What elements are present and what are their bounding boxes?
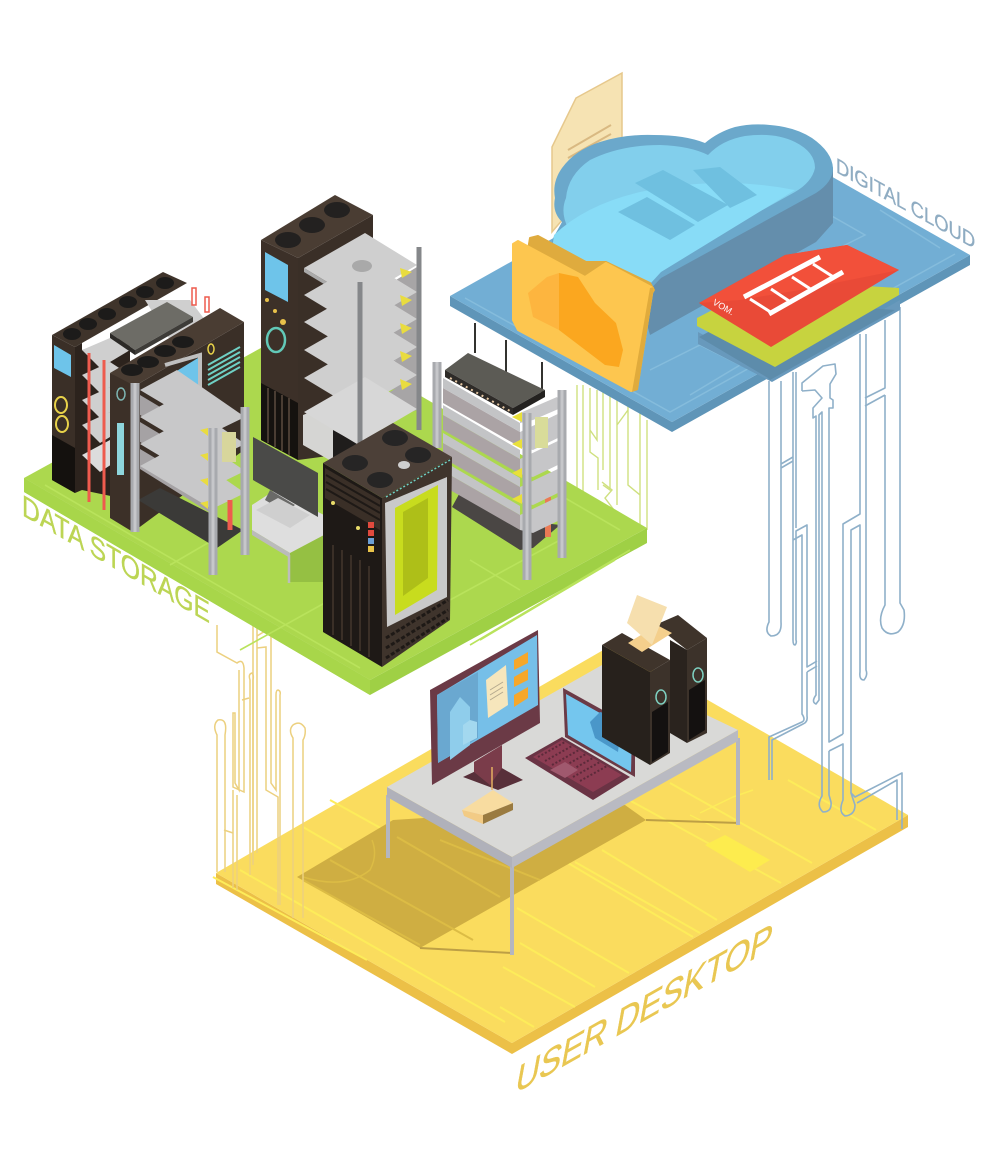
middle server with rack shelves <box>110 308 245 575</box>
laptop <box>525 688 635 800</box>
icon: document on stand <box>628 625 672 652</box>
icon: layered film package <box>697 245 899 380</box>
label: digital cloud: DIGITAL CLOUD <box>836 154 975 254</box>
panel: digital cloud platform <box>450 129 970 432</box>
router <box>110 302 193 350</box>
desktop towers <box>602 595 707 765</box>
far-left server with router <box>52 272 209 510</box>
circuit lines: blue, cloud to desktop <box>767 307 904 829</box>
label: data storage: DATA STORAGE <box>22 489 210 631</box>
desk shadow on platform <box>297 805 739 953</box>
icon: document behind cloud <box>552 73 622 232</box>
icon: cloud <box>552 124 833 335</box>
rack router <box>475 323 542 393</box>
cyan vent grid <box>208 347 240 385</box>
panel: user desktop platform <box>213 645 908 1054</box>
label: user desktop: USER DESKTOP <box>512 914 776 1103</box>
tall server with shelves <box>261 195 419 470</box>
workstation on storage floor <box>252 437 324 583</box>
package label: VOM. <box>711 297 736 317</box>
panel: data storage platform <box>24 326 647 695</box>
router rack <box>437 323 563 580</box>
monitor <box>430 630 540 790</box>
front server with yellow door <box>323 423 452 667</box>
platform extension tab <box>698 300 900 382</box>
user desk <box>387 665 738 955</box>
circuit lines: green, storage to cloud <box>577 385 647 530</box>
bottom drive box <box>303 390 365 462</box>
small router on desk <box>462 767 513 824</box>
circuit lines: yellow, storage to desktop <box>215 625 305 918</box>
icon: folder with cloud <box>513 236 654 392</box>
icon: film strip <box>744 257 843 314</box>
